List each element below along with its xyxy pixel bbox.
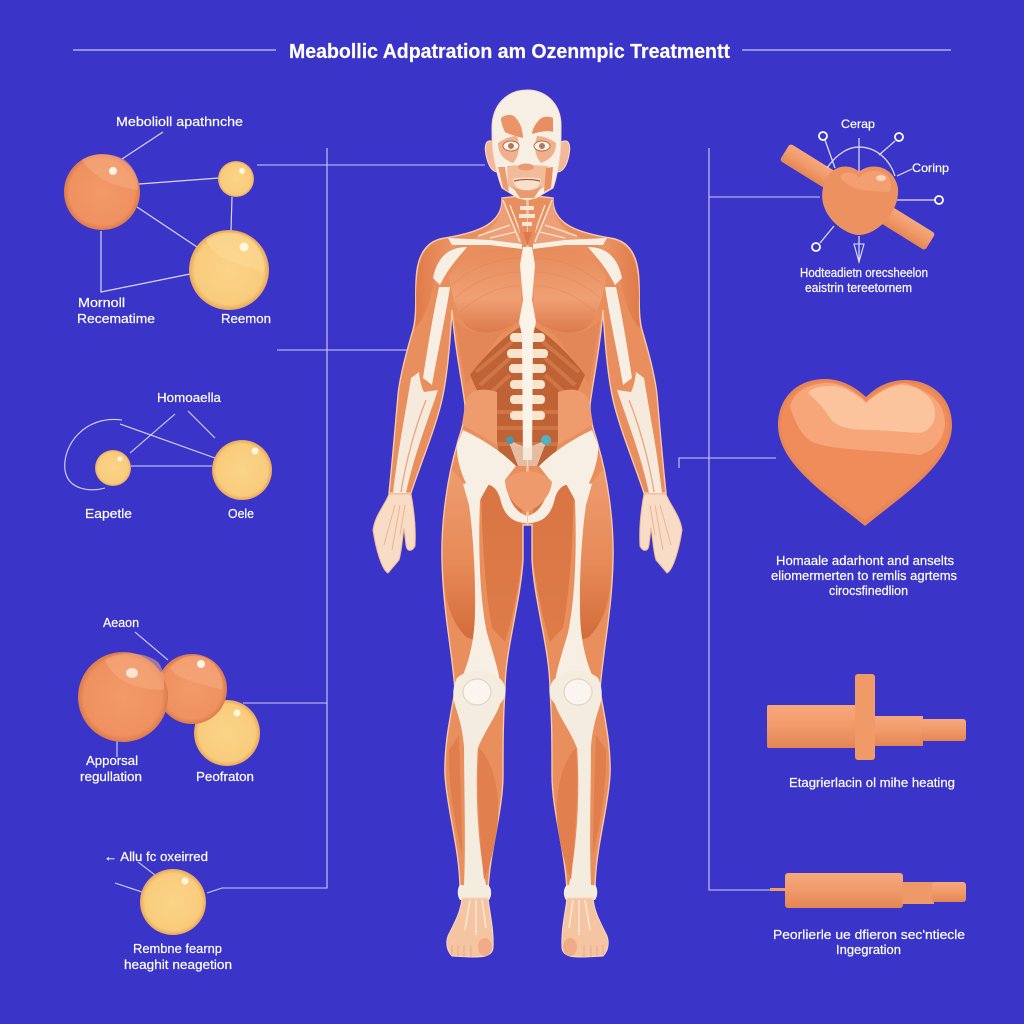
mouth bbox=[513, 178, 541, 190]
diagram: hormone spheres bbox=[65, 390, 272, 521]
diagram: metabolic spheres: Reemon bbox=[221, 311, 271, 326]
connector lines bbox=[207, 148, 820, 893]
diagram: single sphere: ← Allu fc oxeirred bbox=[104, 849, 208, 864]
diagram: single sphere bbox=[104, 849, 232, 972]
body figure bbox=[373, 90, 682, 957]
eyes bbox=[503, 141, 519, 151]
diagram: hormone spheres: Eapetle bbox=[85, 506, 132, 521]
diagram: single sphere: heaghit neagetion bbox=[124, 957, 232, 972]
trachea bbox=[519, 208, 535, 224]
diagram: sphere cluster: Peofraton bbox=[196, 769, 254, 784]
diagram: hormone spheres: Oele bbox=[228, 506, 254, 521]
diagram: sphere cluster bbox=[78, 615, 260, 784]
title: Meabollic Adpatration am Ozenmpic Treatmentt bbox=[289, 41, 730, 63]
diagram: sphere cluster: regullation bbox=[80, 769, 142, 784]
spine and sternum bbox=[519, 247, 536, 460]
large heart: Homaale adarhont and anselts bbox=[776, 553, 955, 568]
injector two: Ingegration bbox=[836, 942, 901, 957]
diagram: single sphere: Rembne fearnp bbox=[133, 941, 222, 956]
diagram: metabolic spheres: Mebolioll apathnche bbox=[116, 114, 243, 129]
large heart: eliomermerten to remlis agrtems bbox=[771, 568, 957, 583]
large heart bbox=[771, 379, 957, 598]
nose bbox=[518, 138, 534, 166]
diagram: sphere cluster: Apporsal bbox=[86, 753, 138, 768]
large heart: cirocsfinedlion bbox=[829, 583, 908, 598]
injector two bbox=[770, 873, 966, 957]
diagram: hormone spheres: Homoaella bbox=[157, 390, 222, 405]
pelvic organ bbox=[505, 472, 552, 512]
diagram: small heart with pipe: Cerap bbox=[841, 117, 875, 131]
diagram: small heart with pipe: eaistrin tereetornem bbox=[805, 281, 912, 295]
diagram: small heart with pipe bbox=[780, 117, 949, 295]
face muscles bbox=[501, 115, 523, 138]
head bbox=[492, 90, 561, 200]
injector two: Peorlierle ue dfieron sec'ntiecle bbox=[773, 927, 965, 942]
diagram: metabolic spheres: Recematime bbox=[77, 311, 155, 326]
diagram: metabolic spheres bbox=[64, 114, 271, 326]
injector one: Etagrierlacin ol mihe heating bbox=[789, 775, 955, 790]
diagram: metabolic spheres: Mornoll bbox=[78, 295, 125, 310]
diagram: small heart with pipe: Corinp bbox=[912, 161, 949, 175]
diagram: sphere cluster: Aeaon bbox=[103, 615, 139, 630]
injector one bbox=[767, 674, 966, 790]
diagram: small heart with pipe: Hodteadietn orecsheelon bbox=[800, 266, 928, 280]
